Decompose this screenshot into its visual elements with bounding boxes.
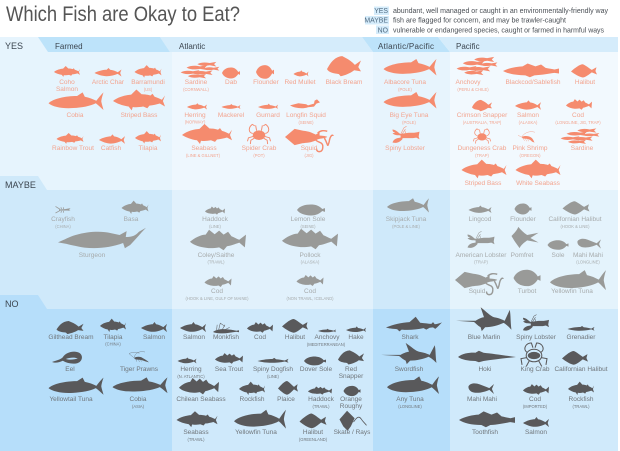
- Skipjack Tuna: Skipjack Tuna: [386, 216, 427, 223]
- Haddock: Haddock: [308, 396, 335, 403]
- Crayfish: Crayfish: [51, 216, 75, 223]
- Monkfish: Monkfish: [213, 334, 239, 341]
- Lemon Sole: [291, 205, 326, 229]
- Tiger Prawns: [120, 352, 159, 373]
- Crimson Snapper: [457, 100, 508, 125]
- Eel: Eel: [65, 366, 75, 373]
- background: NO row: [0, 295, 618, 451]
- row label: NO: NO: [5, 299, 18, 309]
- Halibut: [282, 319, 308, 341]
- Rockfish: [568, 382, 594, 409]
- Tilapia: [135, 131, 161, 152]
- Cod: [185, 276, 249, 301]
- Yellowfin Tuna: Yellowfin Tuna: [551, 288, 593, 295]
- Cod: [555, 99, 601, 125]
- Squid: Squid: [301, 145, 318, 152]
- column headers: Farmed: [55, 42, 83, 51]
- Pink Shrimp: Pink Shrimp: [512, 145, 548, 152]
- Herring: Herring: [184, 112, 206, 119]
- King Crab: King Crab: [521, 366, 550, 373]
- Anchovy: [456, 57, 497, 92]
- Rockfish: (TRAWL): [573, 404, 590, 409]
- Turbot: Turbot: [518, 288, 536, 295]
- Coho Salmon: [54, 66, 80, 93]
- Halibut: Halibut: [575, 79, 595, 86]
- Seabass: (LINE & GILLNET): [186, 153, 221, 158]
- Yellowfin Tuna: [234, 410, 286, 436]
- Hake: Hake: [348, 334, 364, 341]
- Catfish: Catfish: [101, 145, 121, 152]
- Skate / Rays: Skate / Rays: [334, 429, 371, 436]
- Lemon Sole: Lemon Sole: [291, 216, 326, 223]
- Yellowtail Tuna: [48, 378, 104, 403]
- Tilapia: Tilapia: [139, 145, 158, 152]
- Arctic Char: [92, 68, 125, 86]
- Coho Salmon: Salmon: [56, 86, 78, 93]
- Lingcod: Lingcod: [469, 216, 492, 223]
- Big Eye Tuna: Big Eye Tuna: [390, 112, 429, 119]
- Pink Shrimp: [512, 132, 548, 158]
- Coho Salmon: Coho: [59, 79, 75, 86]
- Anchovy: (MEDITERRANEAN): [307, 342, 346, 347]
- Halibut: [571, 64, 597, 86]
- Orange Roughy: [340, 386, 363, 410]
- Dungeness Crab: Dungeness Crab: [458, 145, 507, 152]
- American Lobster: [456, 231, 507, 264]
- Eel: [52, 352, 82, 373]
- Gilthead Bream: Gilthead Bream: [48, 334, 94, 341]
- Swordfish: [381, 343, 436, 373]
- Rockfish: Rockfish: [240, 396, 265, 403]
- Cobia: (ASIA): [132, 404, 145, 409]
- Gurnard: Gurnard: [256, 112, 280, 119]
- column headers: Atlantic/Pacific: [378, 42, 434, 51]
- Lemon Sole: (SEINE): [300, 224, 316, 229]
- Rockfish: [239, 382, 265, 403]
- Halibut: Halibut: [303, 429, 323, 436]
- Squid: (JIG): [304, 153, 314, 158]
- Spiny Lobster: Spiny Lobster: [516, 334, 557, 341]
- Sturgeon: [58, 228, 146, 259]
- Yellowtail Tuna: Yellowtail Tuna: [49, 396, 93, 403]
- Cod: (HOOK & LINE, GULF OF MAINE): [185, 296, 249, 301]
- Cod: Cod: [304, 288, 316, 295]
- Red Snapper: Snapper: [339, 373, 364, 380]
- Sardine: Sardine: [185, 79, 208, 86]
- Halibut: (GREENLAND): [299, 437, 328, 442]
- Californian Halibut: [554, 351, 608, 373]
- Salmon: Salmon: [183, 334, 205, 341]
- Skipjack Tuna: (POLE & LINE): [392, 224, 421, 229]
- Anchovy: Anchovy: [456, 79, 481, 86]
- Spiny Dogfish: (LINE): [267, 374, 280, 379]
- Rainbow Trout: Rainbow Trout: [52, 145, 94, 152]
- Pink Shrimp: (OREGON): [520, 153, 541, 158]
- Cod: (IMPORTED): [523, 404, 548, 409]
- Swordfish: Swordfish: [395, 366, 424, 373]
- Gilthead Bream: [48, 321, 94, 341]
- Halibut: Halibut: [285, 334, 305, 341]
- Salmon: Salmon: [525, 429, 547, 436]
- Californian Halibut: Californian Halibut: [554, 366, 608, 373]
- Dab: Dab: [225, 79, 237, 86]
- Grenadier: [567, 326, 596, 341]
- Cod: [247, 322, 273, 341]
- Squid: [455, 272, 503, 295]
- Flounder: [510, 204, 537, 223]
- Tilapia: Tilapia: [104, 334, 123, 341]
- Grenadier: Grenadier: [567, 334, 596, 341]
- Crayfish: (CHINA): [55, 224, 71, 229]
- Salmon: [515, 100, 541, 125]
- Big Eye Tuna: [384, 92, 436, 125]
- Salmon: [141, 322, 167, 341]
- Cobia: Cobia: [130, 396, 147, 403]
- Arctic Char: Arctic Char: [92, 79, 125, 86]
- background: MAYBE row: [0, 176, 618, 309]
- Dab: [222, 68, 240, 86]
- Barramundi: [131, 65, 165, 92]
- American Lobster: (TRAP): [474, 260, 488, 264]
- Mahi Mahi: [573, 239, 603, 264]
- Halibut: [299, 414, 328, 442]
- Dover Sole: [300, 357, 332, 373]
- Sturgeon: Sturgeon: [79, 252, 106, 259]
- Tilapia: (CHINA): [105, 342, 121, 346]
- legend: YES: [374, 8, 388, 15]
- Salmon: [180, 322, 206, 341]
- Striped Bass: Striped Bass: [465, 180, 502, 187]
- Tilapia: [100, 319, 126, 346]
- Salmon: Salmon: [517, 112, 539, 119]
- Salmon: [523, 417, 549, 436]
- Flounder: Flounder: [253, 79, 280, 86]
- Cod: Cod: [211, 288, 223, 295]
- King Crab: [521, 343, 550, 373]
- Barramundi: Barramundi: [131, 79, 165, 86]
- Albacore Tuna: (POLE): [398, 87, 412, 92]
- Californian Halibut: [548, 201, 602, 229]
- Sardine: [561, 128, 599, 152]
- Crimson Snapper: Crimson Snapper: [457, 112, 508, 119]
- Red Mullet: Red Mullet: [284, 79, 316, 86]
- Californian Halibut: Californian Halibut: [548, 216, 602, 223]
- Mahi Mahi: Mahi Mahi: [467, 396, 497, 403]
- Flounder: [253, 65, 280, 86]
- legend: MAYBE: [364, 18, 388, 24]
- Mahi Mahi: (LONGLINE): [576, 260, 600, 264]
- Haddock: (LINE): [209, 224, 222, 229]
- Red Mullet: [284, 70, 316, 86]
- Californian Halibut: (HOOK & LINE): [561, 224, 590, 229]
- Pollock: Pollock: [300, 252, 321, 259]
- Barramundi: (US): [144, 87, 153, 92]
- Albacore Tuna: [384, 59, 436, 92]
- Chilean Seabass: Chilean Seabass: [176, 396, 226, 403]
- Herring: Herring: [180, 366, 202, 373]
- White Seabass: [516, 160, 561, 187]
- Sardine: Sardine: [571, 145, 594, 152]
- Toothfish: [459, 411, 515, 436]
- Chilean Seabass: [176, 378, 226, 403]
- legend: [364, 6, 609, 34]
- Hoki: Hoki: [478, 366, 492, 373]
- Mahi Mahi: Mahi Mahi: [573, 252, 603, 259]
- Squid: Squid: [469, 288, 486, 295]
- Flounder: Flounder: [510, 216, 537, 223]
- Albacore Tuna: Albacore Tuna: [384, 79, 426, 86]
- Skate / Rays: [334, 411, 371, 436]
- column headers: [38, 37, 618, 52]
- Lingcod: [468, 206, 492, 223]
- Crayfish: [51, 206, 75, 229]
- Gurnard: [256, 104, 280, 119]
- Herring: [177, 357, 205, 379]
- American Lobster: American Lobster: [456, 252, 507, 259]
- Any Tuna: Any Tuna: [396, 396, 424, 403]
- Skipjack Tuna: [386, 198, 429, 229]
- Plaice: Plaice: [277, 396, 295, 403]
- Spiny Dogfish: Spiny Dogfish: [253, 366, 293, 373]
- Basa: [122, 201, 148, 223]
- Black Bream: Black Bream: [326, 79, 362, 86]
- Seabass: Seabass: [183, 429, 209, 436]
- Sole: [548, 240, 568, 259]
- Haddock: [308, 387, 335, 409]
- Coley/Saithe: Coley/Saithe: [198, 252, 235, 259]
- panel: NO fish: [48, 307, 608, 442]
- Spiny Lobster: [385, 126, 426, 152]
- Turbot: [514, 270, 540, 295]
- Cod: (LONGLINE, JIG, TRAP): [555, 120, 601, 125]
- Squid: [285, 129, 333, 158]
- Hake: [346, 326, 366, 341]
- Sardine: [181, 62, 219, 92]
- Striped Bass: Striped Bass: [121, 112, 158, 119]
- Black Bream: [326, 56, 362, 86]
- Mackerel: [218, 104, 245, 119]
- Sole: Sole: [551, 252, 565, 259]
- Haddock: (TRAWL): [313, 404, 330, 409]
- Catfish: [99, 134, 125, 152]
- Plaice: [277, 381, 298, 403]
- column headers: Atlantic: [179, 42, 205, 51]
- Sea Trout: [215, 353, 243, 373]
- panel: YES fish: [48, 56, 601, 187]
- Cod: (NON TRAWL, ICELAND): [286, 296, 334, 301]
- Haddock: Haddock: [202, 216, 229, 223]
- Shark: Shark: [402, 334, 419, 341]
- Dungeness Crab: (TRAP): [475, 153, 489, 158]
- Cod: Cod: [529, 396, 541, 403]
- Striped Bass: [462, 160, 506, 187]
- legend: vulnerable or endangered species, caught or farmed in harmful ways: [393, 28, 605, 34]
- legend: abundant, well managed or caught in an environmentally-friendly way: [393, 8, 609, 15]
- Pomfret: Pomfret: [511, 252, 534, 259]
- Coley/Saithe: (TRAWL): [208, 260, 225, 264]
- Spiny Lobster: Spiny Lobster: [385, 145, 426, 152]
- Spider Crab: [242, 124, 277, 158]
- Cod: Cod: [254, 334, 266, 341]
- Monkfish: [213, 323, 239, 341]
- Sea Trout: Sea Trout: [215, 366, 243, 373]
- Mackerel: Mackerel: [218, 112, 245, 119]
- Blue Marlin: [456, 307, 511, 341]
- Salmon: (ALASKA): [519, 120, 538, 125]
- Cobia: [112, 377, 168, 409]
- Longfin Squid: (SEINE): [298, 120, 314, 125]
- Basa: Basa: [124, 216, 139, 223]
- Toothfish: Toothfish: [472, 429, 498, 436]
- Big Eye Tuna: (POLE): [402, 120, 416, 125]
- Spider Crab: Spider Crab: [242, 145, 277, 152]
- Red Snapper: Red: [345, 366, 357, 373]
- Crimson Snapper: (AUSTRALIA, TRAP): [463, 120, 502, 125]
- Cobia: Cobia: [67, 112, 84, 119]
- Dungeness Crab: [458, 129, 507, 158]
- Hoki: [458, 351, 516, 373]
- legend: fish are flagged for concern, and may be trawler-caught: [393, 18, 566, 24]
- Yellowfin Tuna: [550, 270, 606, 295]
- Anchovy: Anchovy: [315, 334, 340, 341]
- Blue Marlin: Blue Marlin: [468, 334, 501, 341]
- Pollock: [282, 229, 338, 264]
- Striped Bass: [113, 90, 165, 119]
- Dover Sole: Dover Sole: [300, 366, 332, 373]
- Salmon: Salmon: [143, 334, 165, 341]
- row label: MAYBE: MAYBE: [5, 180, 36, 190]
- Shark: [386, 317, 442, 341]
- Blackcod/Sablefish: Blackcod/Sablefish: [506, 79, 561, 86]
- Orange Roughy: Orange: [340, 396, 362, 403]
- White Seabass: White Seabass: [516, 180, 561, 187]
- Longfin Squid: [286, 99, 326, 125]
- Coley/Saithe: [190, 230, 246, 264]
- Mahi Mahi: [467, 383, 497, 403]
- Pomfret: [511, 227, 538, 259]
- background: YES row: [0, 37, 618, 190]
- Haddock: [202, 207, 229, 229]
- Spiny Lobster: [516, 315, 557, 341]
- title: Which Fish are Okay to Eat?: [6, 3, 240, 26]
- Pollock: (ALASKA): [301, 260, 320, 264]
- Spiny Dogfish: [253, 358, 293, 379]
- Herring: [184, 103, 207, 124]
- Herring: (N. ATLANTIC): [177, 374, 205, 379]
- row label: YES: YES: [5, 41, 23, 51]
- Cod: [523, 384, 549, 409]
- Cobia: [48, 92, 104, 119]
- Orange Roughy: Roughy: [340, 403, 363, 410]
- Tiger Prawns: Tiger Prawns: [120, 366, 159, 373]
- Seabass: [182, 124, 232, 158]
- Rockfish: Rockfish: [569, 396, 594, 403]
- legend: NO: [378, 28, 389, 34]
- Seabass: Seabass: [191, 145, 217, 152]
- Cod: [286, 275, 334, 301]
- Anchovy: [307, 329, 346, 347]
- column headers: Pacific: [456, 42, 480, 51]
- Sardine: (CORNWALL): [183, 87, 210, 92]
- Cod: Cod: [572, 112, 584, 119]
- Anchovy: (PERU & CHILE): [457, 87, 489, 92]
- Herring: (NORWAY): [185, 120, 206, 124]
- Blackcod/Sablefish: [503, 64, 561, 86]
- Spider Crab: (POT): [253, 153, 265, 158]
- Seabass: [176, 411, 218, 442]
- Yellowfin Tuna: Yellowfin Tuna: [235, 429, 277, 436]
- panel: MAYBE fish: [51, 198, 606, 301]
- Red Snapper: [338, 350, 364, 380]
- Rainbow Trout: [52, 133, 94, 152]
- Longfin Squid: Longfin Squid: [286, 112, 326, 119]
- Any Tuna: [387, 376, 439, 409]
- Seabass: (TRAWL): [188, 437, 205, 442]
- Any Tuna: (LONGLINE): [398, 404, 422, 409]
